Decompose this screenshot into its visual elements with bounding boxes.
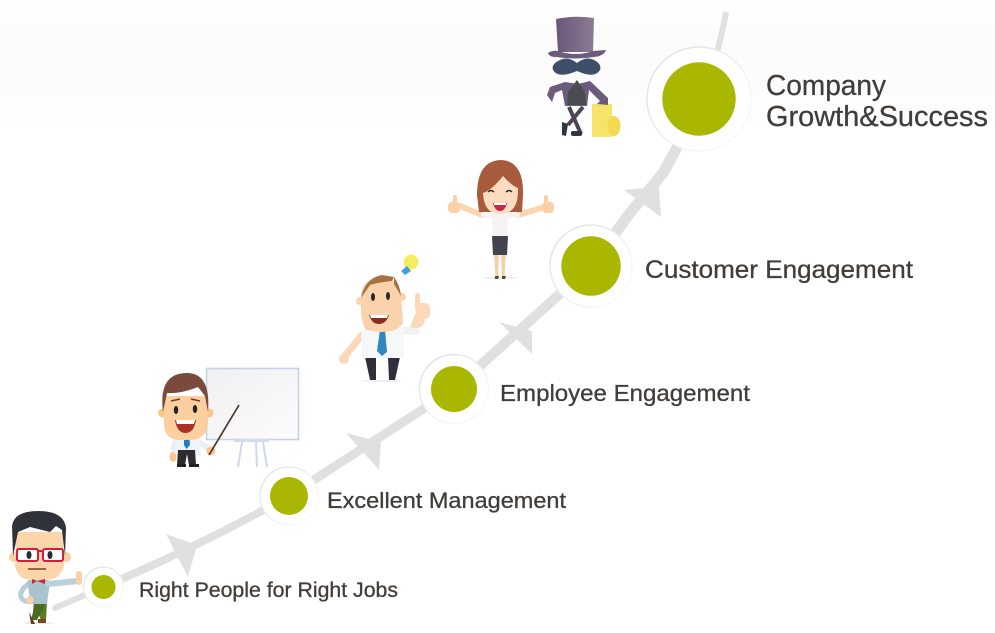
arrowhead 4	[624, 187, 661, 217]
character: man with idea	[339, 254, 430, 382]
milestone 2	[260, 467, 318, 525]
character: woman with thumbs up	[448, 160, 554, 279]
label: employee engagement: Employee Engagement	[500, 380, 751, 406]
milestone 5	[647, 47, 751, 151]
milestone 1	[84, 567, 124, 607]
label: company growth and success	[766, 70, 988, 133]
arrowhead 3	[499, 322, 532, 354]
milestone 3	[420, 354, 488, 424]
label: company growth and success: Company	[766, 70, 886, 102]
milestone 4	[550, 225, 632, 307]
growth path	[55, 12, 726, 608]
arrowhead 1	[166, 534, 197, 577]
label: company growth and success: Growth&Success	[766, 101, 988, 133]
label: right people: Right People for Right Jobs	[139, 579, 398, 602]
arrowhead 2	[346, 433, 381, 470]
label: excellent management: Excellent Management	[327, 488, 566, 513]
character: man with red glasses	[9, 511, 82, 624]
character: presenter with board	[158, 368, 298, 467]
character: tycoon with coins	[547, 17, 620, 137]
label: customer engagement: Customer Engagement	[645, 256, 913, 284]
